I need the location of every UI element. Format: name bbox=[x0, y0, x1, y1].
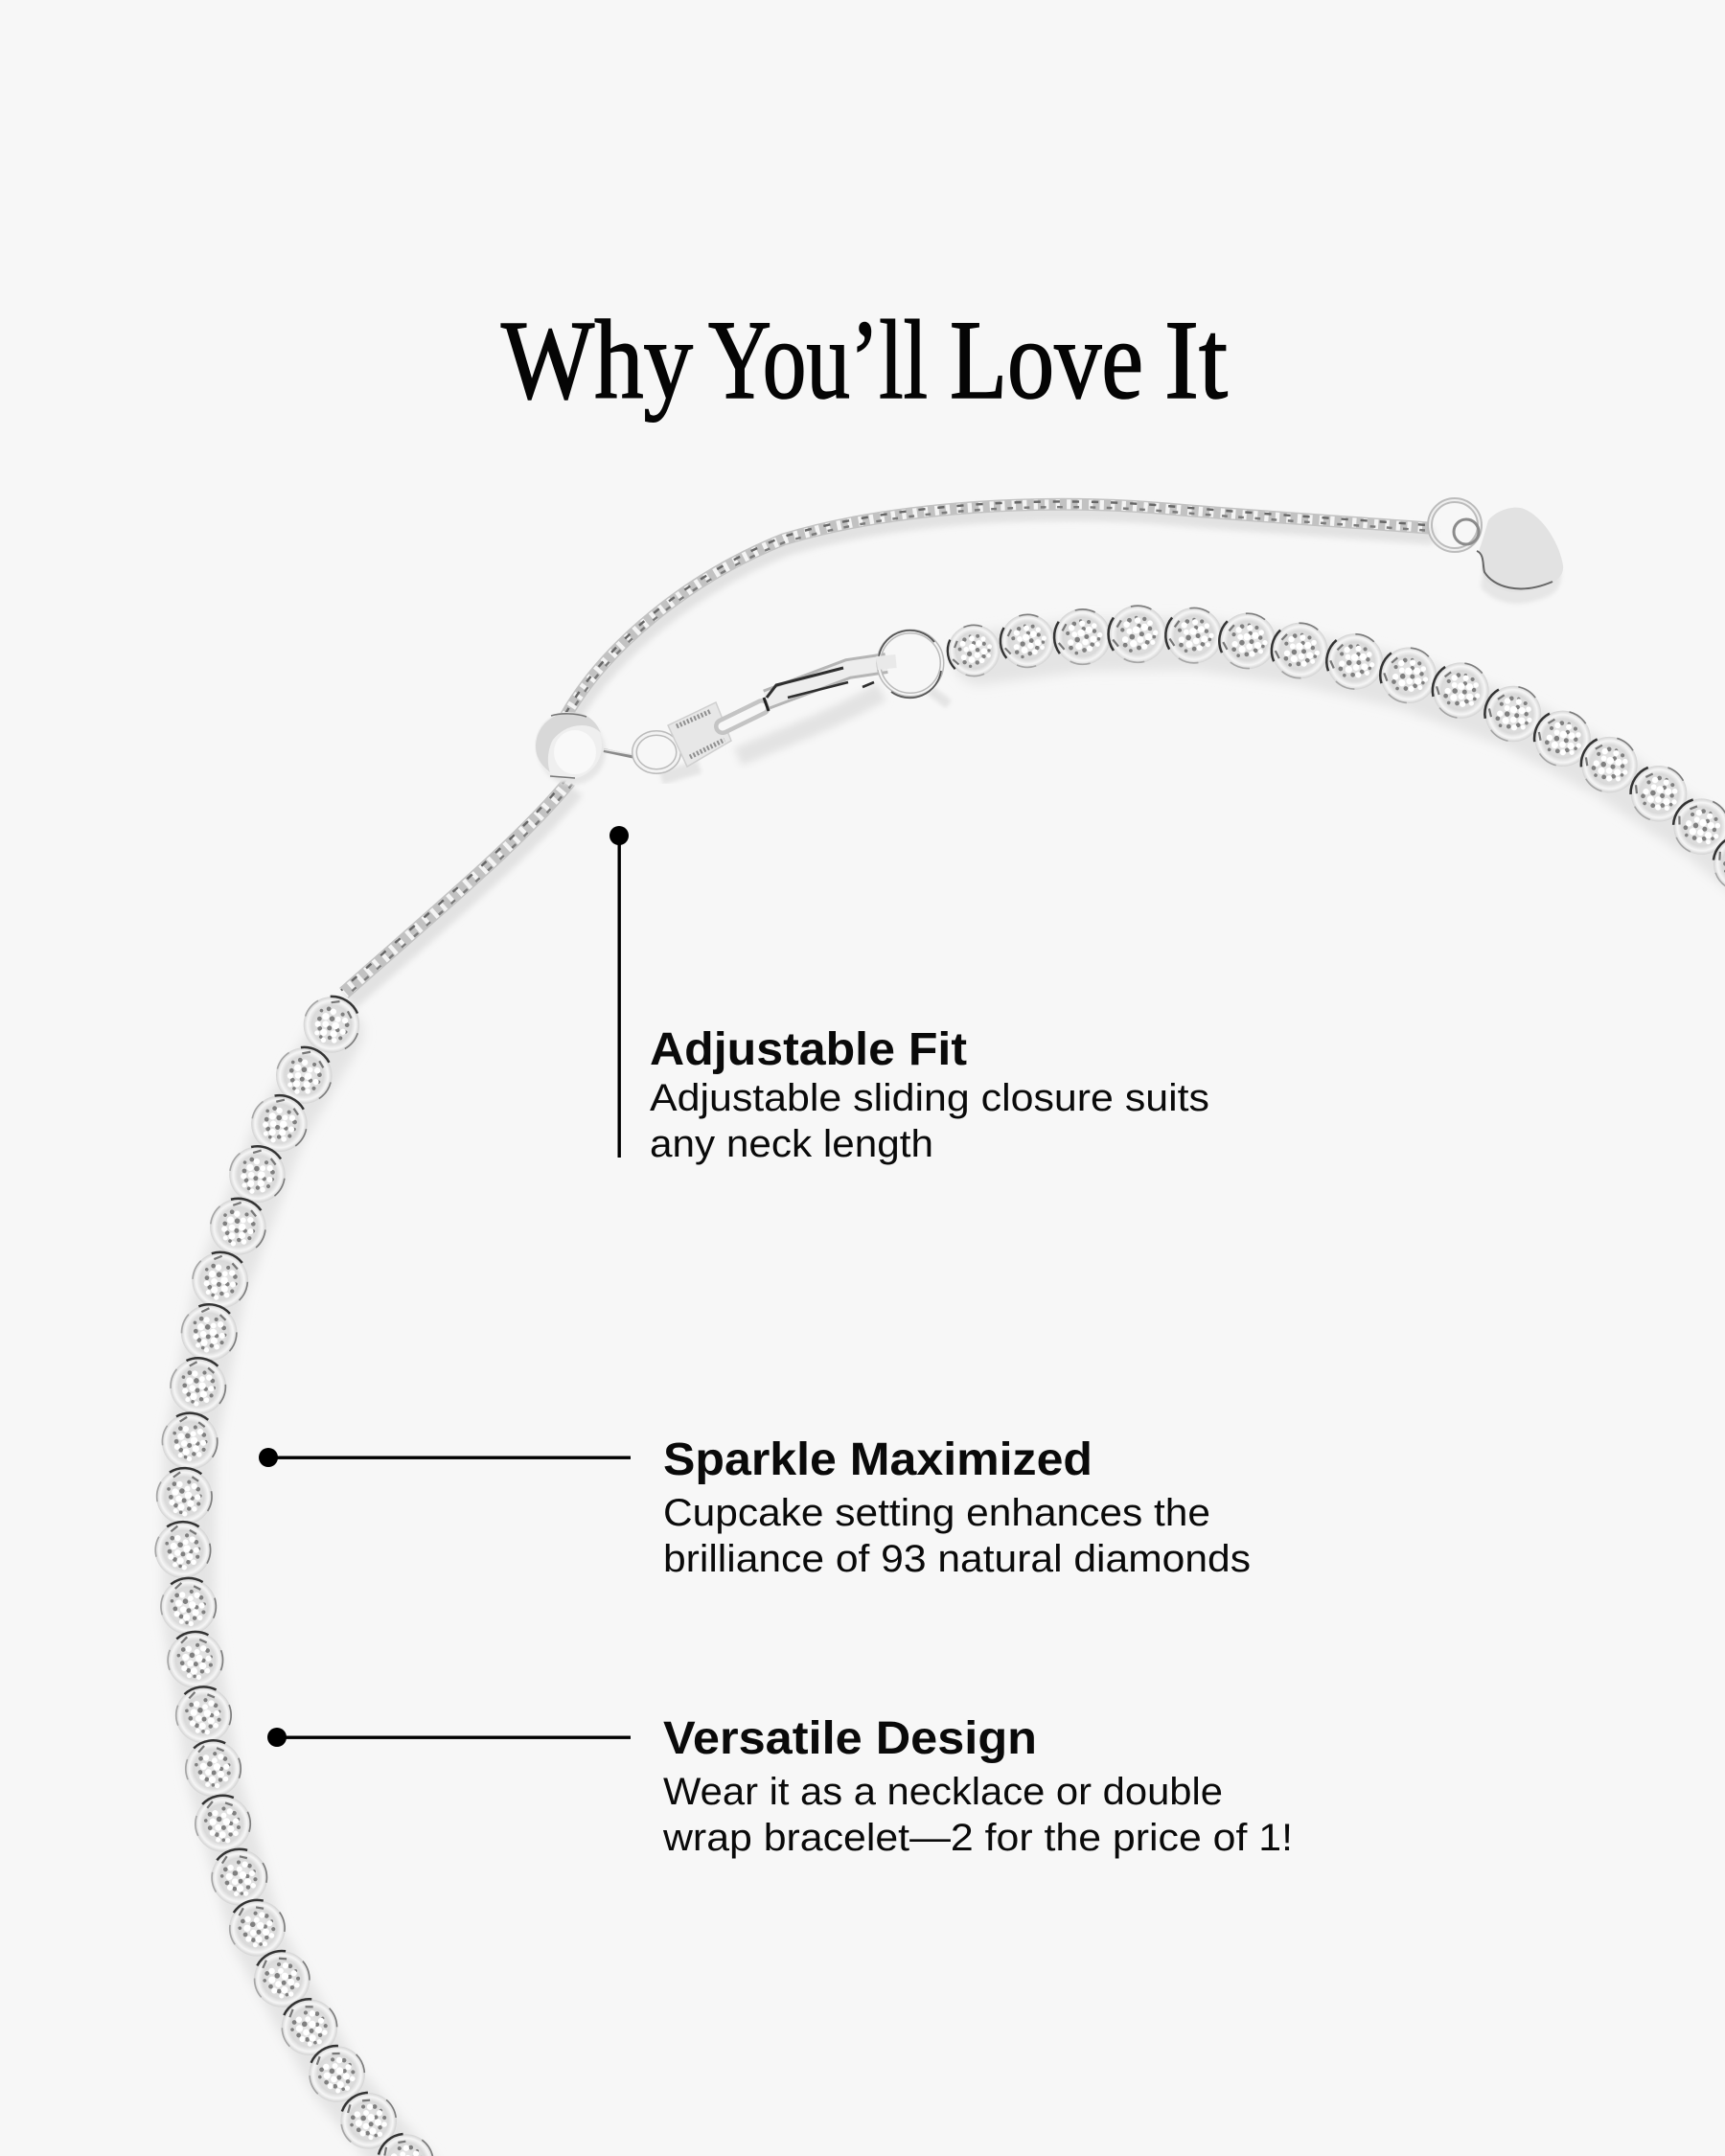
heart charm with ring bbox=[1430, 500, 1563, 604]
description: versatile design: wrap bracelet—2 for the price of 1! bbox=[662, 1817, 1293, 1859]
title: You’ll bbox=[708, 297, 928, 423]
description: versatile design bbox=[662, 1771, 1293, 1859]
lower wheat chain bbox=[341, 778, 575, 1001]
description: sparkle maximized: Cupcake setting enhances the bbox=[663, 1492, 1210, 1534]
heading: versatile design: Versatile Design bbox=[663, 1713, 1037, 1764]
top row of pave diamond beads bbox=[943, 605, 1725, 904]
description: adjustable fit: any neck length bbox=[650, 1123, 933, 1165]
title: Why bbox=[501, 297, 693, 423]
title: It bbox=[1164, 297, 1228, 423]
title: Love bbox=[950, 297, 1143, 423]
sliding bead closure bbox=[535, 712, 606, 785]
callout: adjustable fit bbox=[610, 826, 1209, 1165]
description: adjustable fit: Adjustable sliding closure suits bbox=[650, 1077, 1209, 1119]
leader line with dot bbox=[267, 1728, 631, 1747]
description: versatile design: Wear it as a necklace or double bbox=[663, 1771, 1223, 1813]
necklace photo illustration bbox=[155, 501, 1725, 2156]
soft cast shadows under beads bbox=[189, 644, 1725, 2156]
title bbox=[501, 297, 1228, 423]
callout: sparkle maximized bbox=[259, 1434, 1251, 1580]
small jump ring, tag and lobster clasp bbox=[604, 631, 949, 778]
upper wheat chain bbox=[565, 501, 1434, 724]
description: sparkle maximized: brilliance of 93 natural diamonds bbox=[663, 1538, 1251, 1580]
callout: versatile design bbox=[267, 1713, 1293, 1859]
heading: sparkle maximized: Sparkle Maximized bbox=[663, 1434, 1092, 1485]
heading: adjustable fit: Adjustable Fit bbox=[650, 1024, 967, 1075]
leader line with dot bbox=[259, 1448, 631, 1467]
description: sparkle maximized bbox=[663, 1492, 1251, 1580]
leader line with dot bbox=[610, 826, 629, 1158]
left column of pave diamond beads bbox=[155, 986, 446, 2156]
description: adjustable fit bbox=[650, 1077, 1209, 1165]
